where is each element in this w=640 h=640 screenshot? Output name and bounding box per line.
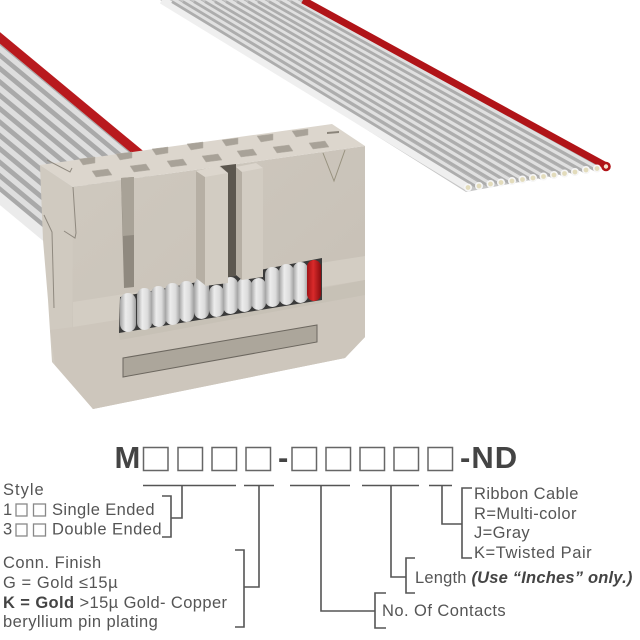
ribbon cable legend: Ribbon Cable — [474, 485, 579, 503]
connector finish legend — [3, 554, 228, 631]
connector finish legend: K = Gold >15µ Gold- Copper — [3, 594, 228, 612]
contact holes — [79, 129, 339, 177]
style legend: 3 — [3, 520, 12, 538]
connector finish legend: G = Gold ≤15µ — [3, 574, 118, 592]
ribbon cable legend — [474, 485, 592, 562]
contacts legend: No. Of Contacts — [382, 602, 506, 620]
right ribbon cable — [160, 0, 611, 192]
style legend: Single Ended — [52, 501, 155, 519]
ribbon cable legend: K=Twisted Pair — [474, 544, 592, 562]
part number code: - — [278, 440, 288, 475]
connector housing — [40, 124, 365, 409]
white mask under left cable — [0, 206, 93, 420]
part number code: -ND — [460, 440, 518, 475]
ribbon coils — [120, 260, 321, 332]
style legend: Style — [3, 481, 45, 499]
style legend: Double Ended — [52, 520, 162, 538]
left face — [40, 165, 130, 409]
part number code — [114, 440, 518, 475]
pin one triangle mark — [323, 150, 345, 181]
style legend: 1 — [3, 501, 12, 519]
part number code: M — [114, 440, 140, 475]
middle band — [73, 256, 365, 327]
lower body — [50, 280, 365, 409]
slot left — [121, 177, 134, 288]
dark gap between ribs — [220, 164, 236, 277]
pin guide rib one — [196, 171, 205, 285]
length legend: Length (Use “Inches” only.) — [415, 569, 633, 587]
left ribbon cable — [0, 28, 170, 339]
cable recess — [119, 258, 322, 333]
pin guide rib two — [236, 167, 242, 280]
connector finish legend: beryllium pin plating — [3, 613, 158, 631]
style legend — [3, 481, 162, 538]
leader lines — [143, 486, 472, 628]
left corner notches — [44, 160, 76, 308]
label recess — [123, 325, 317, 377]
ribbon cable legend: J=Gray — [474, 524, 530, 542]
connector finish legend: Conn. Finish — [3, 554, 102, 572]
top face — [40, 124, 365, 187]
ribbon cable legend: R=Multi-color — [474, 505, 577, 523]
front face — [72, 146, 365, 409]
